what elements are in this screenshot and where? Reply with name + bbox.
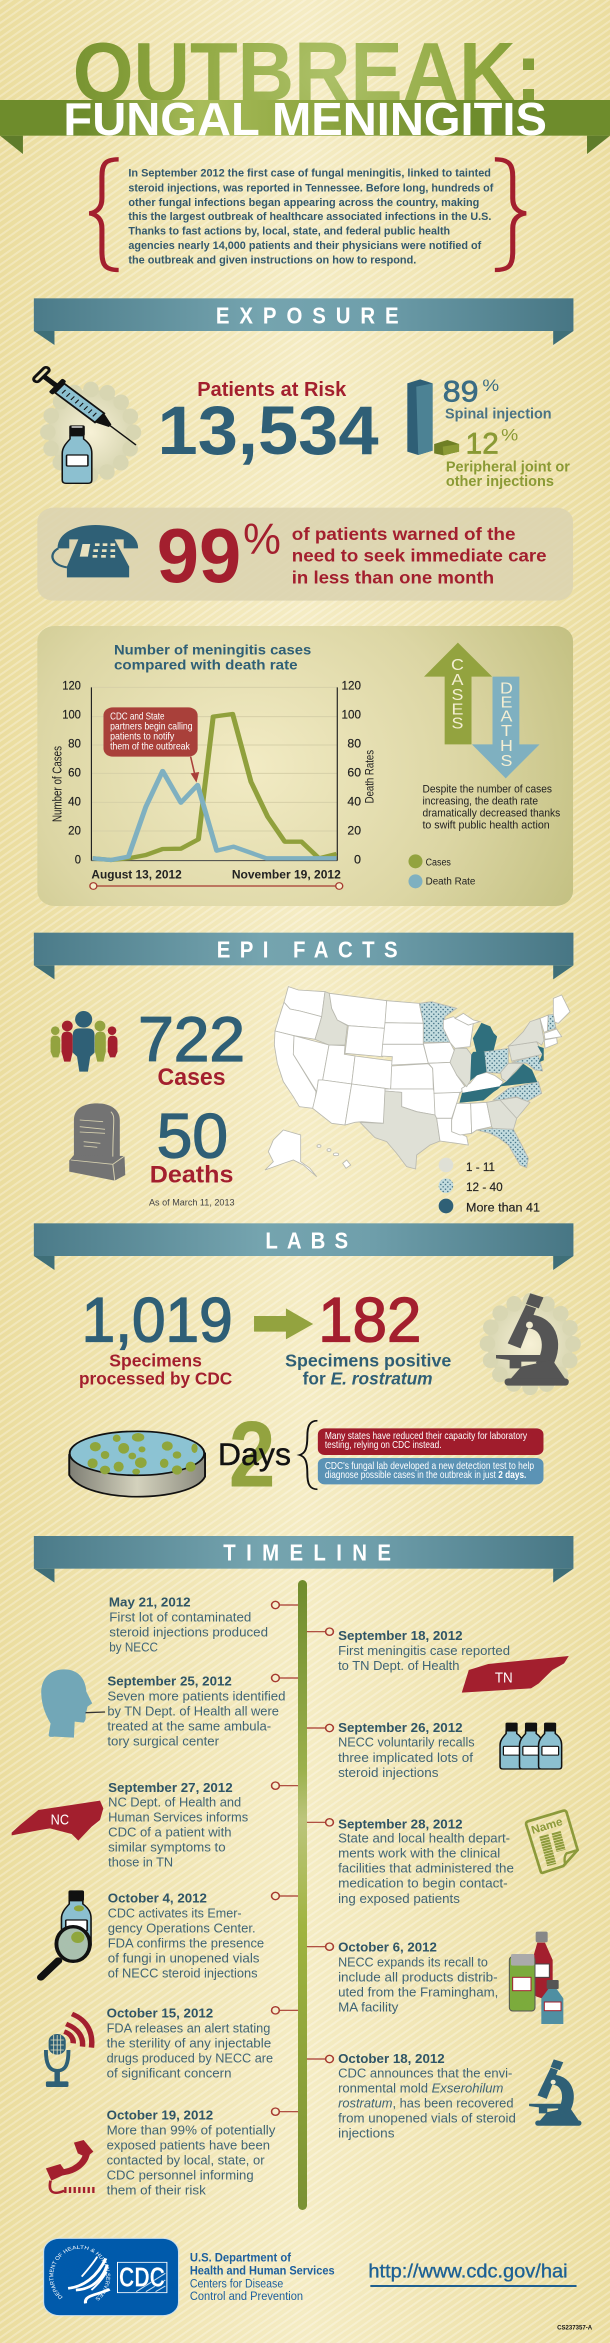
event: October 19: them of their risk: [107, 2183, 207, 2197]
event: October 18: CDC announces that the envi-: [338, 2066, 513, 2080]
icon: microscope teal: [529, 2059, 581, 2126]
event: May 21: [109, 1595, 298, 1654]
icon: name list: [526, 1811, 578, 1873]
arrow: to positive: [254, 1308, 313, 1339]
line chart: 80: [347, 736, 361, 750]
bar: spinal injection: [407, 379, 433, 455]
stat: 182 positive: [285, 1286, 451, 1389]
line chart: 60: [347, 765, 361, 779]
intro text: agencies nearly 14,000 patients and their physicians were notified of: [128, 239, 481, 252]
stat: 722 cases: 722: [138, 1005, 245, 1075]
text: department: Control and Prevention: [190, 2289, 303, 2303]
text: department: [190, 2251, 335, 2303]
line chart: 40: [68, 794, 81, 808]
event: September 25: September 25, 2012: [107, 1674, 232, 1688]
icon: recalled products: [509, 1932, 563, 2024]
arrow: cases up: [424, 643, 492, 744]
section: epi facts: [34, 933, 573, 1208]
stat: 99 percent: %: [243, 514, 281, 563]
stat: 12 percent: other injections: [446, 474, 554, 490]
icon: microphone broadcast: [46, 2014, 92, 2087]
event: October 4: CDC activates its Emer-: [108, 1906, 242, 1920]
chart title: Number of meningitis cases: [114, 642, 311, 658]
section: exposure: [32, 298, 573, 601]
left brace: [89, 159, 119, 270]
event: May 21: First lot of contaminated: [109, 1610, 251, 1624]
event: September 27: [108, 1780, 298, 1824]
text: patients warned: [292, 524, 547, 588]
map: US states by case count: [265, 987, 570, 1177]
event: September 26: three implicated lots of: [338, 1750, 473, 1765]
event: October 18 continued: from unopened vials of steroid: [338, 2111, 516, 2125]
stat: 50 deaths: As of March 11, 2013: [149, 1198, 235, 1208]
banner: timeline: [34, 1536, 573, 1583]
intro text: In September 2012 the first case of fungal meningitis, linked to tainted: [128, 167, 491, 179]
legend: chart: [408, 854, 475, 888]
section: labs: [34, 1223, 573, 1507]
icon: North Carolina: NC: [51, 1812, 69, 1828]
logo: HHS and CDC: [43, 2238, 180, 2316]
subtitle: fungal meningitis: FUNGAL MENINGITIS: [63, 93, 547, 145]
icon: petri dish: [69, 1431, 205, 1497]
date range: August 13, 2012: [91, 868, 182, 881]
arrow: deaths down: S: [501, 752, 512, 770]
event: October 19: [107, 2108, 298, 2197]
header section: [0, 26, 610, 270]
publication code: CS237357-A: [557, 2323, 593, 2331]
event: September 28: ments work with the clinical: [338, 1846, 500, 1860]
logo: HHS and CDC: DEPARTMENT OF HEALTH & HUMAN SERVICES USA: [49, 2245, 110, 2300]
banner: exposure: EXPOSURE: [216, 302, 399, 329]
date range: [90, 868, 343, 889]
icon: three vials: [500, 1723, 562, 1769]
event: September 26: NECC voluntarily recalls: [338, 1735, 475, 1749]
stat: 12 percent: %: [501, 426, 518, 444]
event: September 26: [307, 1720, 475, 1780]
event: September 28: [307, 1816, 514, 1906]
panel: patients warned: [37, 508, 573, 601]
legend: map: 12 - 40: [466, 1180, 503, 1194]
event: September 25: by TN Dept. of Health all were: [107, 1704, 279, 1718]
brace: days: [300, 1421, 317, 1489]
banner: exposure: [34, 298, 573, 345]
event: September 18: [307, 1628, 510, 1673]
text: despite cases: increasing, the death rate: [422, 795, 538, 807]
arrow: cases up: A: [452, 671, 464, 689]
stat: 50 deaths: [149, 1101, 235, 1208]
stat: 50 deaths: Deaths: [150, 1161, 233, 1188]
stat: 182 positive: 182: [318, 1286, 421, 1355]
callout: CDC calling patients: partners begin calling: [110, 721, 193, 732]
date range: November 19, 2012: [232, 868, 341, 881]
banner: timeline: TIMELINE: [223, 1540, 391, 1566]
event: October 6: October 6, 2012: [338, 1940, 437, 1954]
text: despite cases: to swift public health action: [422, 819, 550, 831]
line chart: [50, 678, 377, 866]
right brace: [495, 159, 526, 270]
event: October 15: FDA releases an alert stating: [107, 2021, 270, 2035]
panel: chart background: [37, 626, 573, 906]
callout: CDC calling patients: them of the outbreak: [110, 741, 190, 752]
line chart: 100: [342, 707, 361, 721]
event: September 18: September 18, 2012: [338, 1628, 463, 1643]
event: September 28: medication to begin contact-: [338, 1876, 508, 1890]
line chart: Number of Cases: [50, 746, 65, 822]
event: September 27: Human Services informs: [108, 1810, 248, 1824]
event: October 15: October 15, 2012: [107, 2006, 213, 2020]
line chart: 40: [347, 794, 361, 808]
line chart: Death Rates: [364, 750, 377, 803]
arrow: deaths down: H: [500, 737, 513, 755]
event: May 21: by NECC: [109, 1640, 158, 1654]
text: department: Health and Human Services: [190, 2263, 335, 2277]
event: September 25: treated at the same ambula-: [107, 1719, 271, 1733]
stat: 722 cases: Cases: [158, 1063, 226, 1091]
event: October 6: NECC expands its recall to: [338, 1955, 488, 1969]
legend: map: [439, 1158, 540, 1215]
bar: peripheral injection: [434, 440, 459, 455]
text: despite cases: [422, 783, 560, 831]
event: October 18 continued: [338, 2096, 516, 2140]
event: May 21: steroid injections produced: [109, 1625, 268, 1639]
text: department: Centers for Disease: [190, 2276, 283, 2290]
ribbon: subtitle band: [0, 100, 610, 154]
icon: telephone: [52, 525, 138, 577]
event: October 15: of significant concern: [107, 2066, 231, 2080]
event: September 27: September 27, 2012: [108, 1780, 233, 1795]
note: detection test: [318, 1458, 543, 1484]
arrow: deaths down: D: [500, 680, 513, 697]
legend: map: More than 41: [466, 1201, 540, 1215]
event: October 6: uted from the Framingham,: [338, 1985, 498, 1999]
callout: CDC calling patients: [103, 707, 199, 783]
legend: chart: Cases: [426, 857, 451, 868]
arrow: deaths down: T: [501, 722, 512, 740]
stat: 89 percent: 89: [443, 374, 479, 408]
icon: Tennessee: TN: [495, 1671, 513, 1686]
arrow: deaths down: E: [501, 694, 512, 711]
stat: 1,019 specimens: Specimens: [109, 1351, 202, 1371]
icon: head speaking: [41, 1669, 105, 1738]
note: states reduced capacity: testing, relying on CDC instead.: [325, 1440, 442, 1451]
arrow: deaths down: [472, 677, 540, 778]
text: department: U.S. Department of: [190, 2251, 292, 2264]
intro text: this the largest outbreak of healthcare associated infections in the U.S.: [128, 210, 491, 223]
stat: 182 positive: Specimens positive: [285, 1351, 451, 1371]
event: May 21: May 21, 2012: [109, 1595, 191, 1609]
event: September 28: ing exposed patients: [338, 1891, 460, 1906]
icon: syringe and vial: [32, 366, 143, 483]
icon: people: [51, 1011, 117, 1072]
callout: CDC calling patients: patients to notify: [110, 731, 175, 742]
stat: 99 percent: 99: [157, 514, 241, 599]
event: September 27 continued: those in TN: [108, 1855, 173, 1869]
intro text: other fungal infections began appearing across the country, making: [128, 196, 479, 209]
intro text: [128, 167, 493, 266]
event: October 15: drugs produced by NECC are: [107, 2051, 273, 2065]
section: chart: [37, 626, 573, 906]
event: September 18: to TN Dept. of Health: [338, 1658, 459, 1673]
note: states reduced capacity: Many states have reduced their capacity for laboratory: [325, 1431, 528, 1442]
stat: 12 percent: 12: [466, 426, 499, 460]
event: October 18: [307, 2051, 513, 2095]
banner: labs: [34, 1223, 573, 1270]
line chart: 0: [354, 852, 361, 866]
callout: CDC calling patients: CDC and State: [110, 711, 165, 722]
text: despite cases: Despite the number of cases: [422, 783, 552, 795]
event: October 19: CDC personnel informing: [107, 2168, 254, 2182]
text: patients warned: in less than one month: [292, 568, 494, 588]
event: October 18 continued: injections: [338, 2126, 394, 2140]
stat: 182 positive: for E. rostratum: [303, 1369, 433, 1389]
event: September 25: Seven more patients identified: [107, 1689, 286, 1703]
event: September 27 continued: similar symptoms to: [108, 1840, 226, 1854]
event: October 15: [107, 2006, 298, 2080]
event: October 19: exposed patients have been: [107, 2138, 270, 2152]
event: October 4: FDA confirms the presence: [108, 1936, 264, 1950]
timeline spine: [298, 1580, 307, 2210]
event: September 27 continued: CDC of a patient with: [108, 1825, 231, 1839]
icon: tombstone: [69, 1103, 125, 1181]
line chart: 80: [68, 736, 81, 750]
stat: 2 days: Days: [218, 1437, 291, 1472]
icon: Tennessee: [462, 1656, 569, 1693]
stat: 89 percent: %: [482, 376, 499, 395]
chart title: compared with death rate: [114, 657, 298, 673]
event: October 6: [307, 1940, 498, 2014]
note: detection test: CDC's fungal lab developed a new detection test to help: [325, 1461, 534, 1472]
icon: red handset: [46, 2140, 96, 2193]
intro text: the outbreak and given instructions on how to respond.: [128, 253, 416, 266]
event: September 26: steroid injections: [338, 1765, 438, 1780]
event: October 6: MA facility: [338, 2000, 399, 2014]
event: October 18 continued: rostratum, has been recovered: [338, 2096, 514, 2110]
event: September 28: September 28, 2012: [338, 1816, 463, 1831]
text: despite cases: dramatically decreased thanks: [422, 807, 560, 819]
icon: North Carolina: [12, 1801, 103, 1841]
line chart: 120: [342, 678, 361, 692]
event: October 18: October 18, 2012: [338, 2051, 445, 2066]
stat: 1,019 specimens: processed by CDC: [79, 1369, 232, 1389]
logo: HHS and CDC: CDC: [119, 2262, 165, 2293]
line chart: 20: [68, 823, 81, 837]
event: October 4: of NECC steroid injections: [108, 1966, 258, 1980]
line chart: 120: [62, 678, 81, 692]
event: October 18: ronmental mold Exserohilum: [338, 2081, 504, 2095]
label: patients at risk: Patients at Risk: [197, 378, 347, 401]
legend: chart: Death Rate: [426, 876, 475, 887]
event: September 25: tory surgical center: [107, 1734, 219, 1748]
icon: vial and magnifier: [41, 1890, 91, 1977]
section: timeline lower and footer: [43, 2096, 593, 2331]
line chart: 60: [68, 765, 81, 779]
stat: 1,019 specimens: 1,019: [82, 1286, 233, 1355]
chart title: [114, 642, 311, 673]
note: states reduced capacity: [318, 1428, 543, 1455]
arrow: cases up: C: [451, 656, 464, 674]
intro text: steroid injections, was reported in Tennessee. Before long, hundreds of: [128, 182, 493, 194]
event: October 4: of fungi in unopened vials: [108, 1951, 259, 1965]
arrow: cases up: S: [452, 715, 463, 732]
legend: map: 1 - 11: [466, 1160, 495, 1174]
event: October 19: contacted by local, state, or: [107, 2153, 265, 2167]
banner: epi facts: [34, 933, 573, 979]
intro text: Thanks to fast actions by, local, state, and federal public health: [128, 224, 450, 237]
stat: 89 percent: Spinal injection: [445, 406, 552, 422]
event: October 4: [108, 1891, 298, 1980]
arrow: cases up: E: [452, 701, 463, 718]
stat: 12 percent: Peripheral joint or: [446, 460, 570, 475]
stat: 89 percent: [443, 374, 552, 422]
stat: 2 days: 2: [229, 1403, 275, 1507]
line chart: 20: [347, 823, 361, 837]
event: September 28: facilities that administered the: [338, 1861, 514, 1875]
event: September 18: First meningitis case reported: [338, 1643, 510, 1658]
text: patients warned: need to seek immediate care: [292, 546, 547, 566]
stat: 12 percent: [446, 426, 570, 490]
stat: 13,534: 13,534: [158, 392, 379, 469]
event: October 15: the sterility of any injectable: [107, 2036, 271, 2050]
section: timeline middle: [41, 1816, 581, 2126]
text: patients warned: of patients warned of the: [292, 524, 516, 545]
arrow: deaths down: A: [501, 708, 513, 725]
stat: 1,019 specimens: [79, 1286, 233, 1389]
line chart: 0: [75, 852, 81, 866]
icon: name list: Name: [530, 1816, 564, 1837]
event: September 27: NC Dept. of Health and: [108, 1795, 241, 1809]
arrow: cases up: S: [452, 686, 463, 704]
banner: labs: LABS: [265, 1227, 348, 1254]
event: October 19: October 19, 2012: [107, 2108, 213, 2122]
event: October 4: October 4, 2012: [108, 1891, 207, 1905]
url: http://www.cdc.gov/hai: [368, 2261, 568, 2282]
banner: epi facts: EPI FACTS: [217, 936, 398, 963]
event: October 19: More than 99% of potentially: [107, 2123, 276, 2137]
event: October 4: gency Operations Center.: [108, 1921, 256, 1935]
line chart: 100: [62, 707, 81, 721]
event: September 27 continued: [108, 1825, 231, 1869]
section: timeline upper: [34, 1536, 573, 1824]
event: September 26: September 26, 2012: [338, 1720, 463, 1735]
event: September 28: State and local health depart-: [338, 1831, 510, 1845]
stat: 50 deaths: 50: [157, 1101, 228, 1171]
event: October 6: include all products distrib-: [338, 1970, 498, 1984]
note: detection test: diagnose possible cases in the outbreak in just 2 days.: [325, 1470, 526, 1481]
event: September 25: [107, 1674, 298, 1748]
icon: microscope badge: [487, 1293, 573, 1387]
